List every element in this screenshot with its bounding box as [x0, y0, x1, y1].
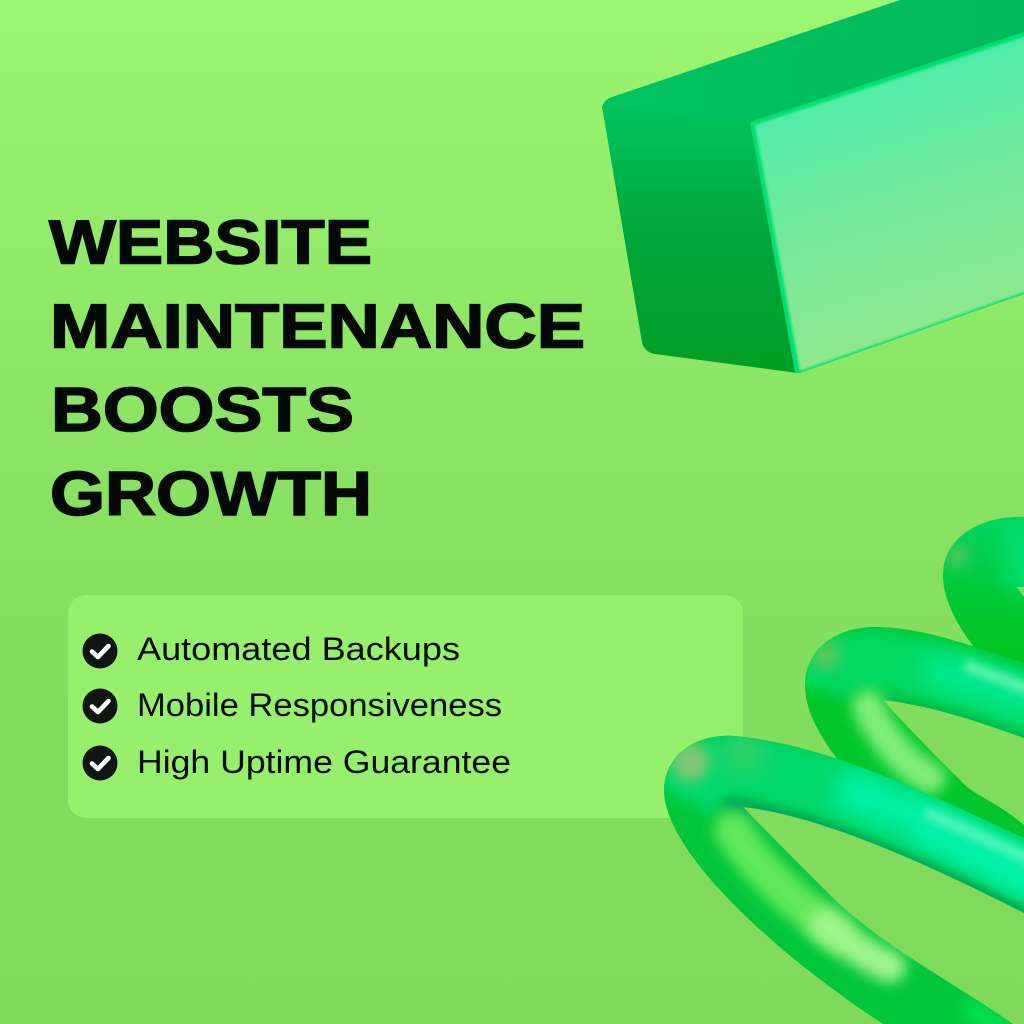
list item: High Uptime Guarantee: High Uptime Guarantee [137, 744, 511, 780]
3D spiral tube: back coil [943, 516, 1024, 663]
title [49, 208, 585, 529]
title: WEBSITE [49, 208, 372, 278]
list item: Automated Backups: Automated Backups [137, 631, 460, 667]
panel: feature list card [68, 595, 743, 818]
icon: check mark [82, 688, 118, 724]
title: MAINTENANCE [50, 292, 585, 362]
3D spiral tube: front coil [660, 730, 1024, 1024]
title: BOOSTS [51, 376, 354, 445]
3D green block [602, 0, 1024, 380]
title: GROWTH [50, 460, 372, 529]
icon: check mark [82, 634, 118, 668]
3D spiral tube: middle coil [805, 627, 1024, 838]
list item: Mobile Responsiveness: Mobile Responsiveness [137, 687, 502, 723]
icon: check mark [82, 746, 118, 780]
